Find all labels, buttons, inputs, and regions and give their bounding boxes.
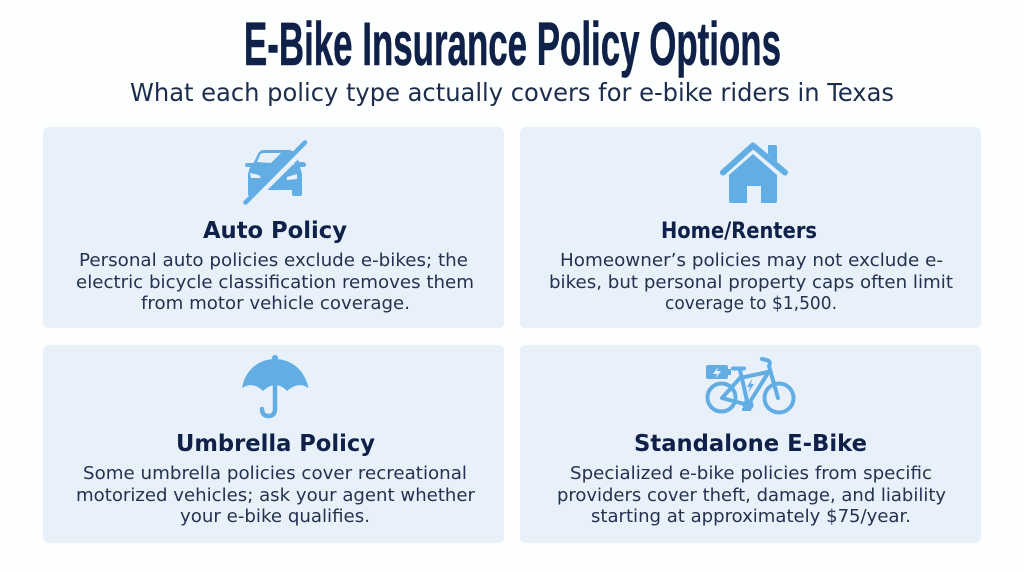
body text: standalone e-bike — [557, 463, 946, 527]
icon: umbrella — [242, 355, 308, 416]
icon: house — [723, 145, 785, 203]
body text: auto policy: from motor vehicle coverage. — [141, 293, 410, 314]
subtitle: What each policy type actually covers for e-bike riders in Texas — [130, 78, 894, 107]
body text: umbrella policy: Some umbrella policies cover recreational — [83, 463, 467, 484]
body text: standalone e-bike: starting at approximately $75/year. — [591, 506, 911, 527]
body text: home/renters — [549, 250, 953, 314]
body text: standalone e-bike: Specialized e-bike policies from specific — [570, 463, 932, 484]
body text: umbrella policy — [76, 463, 476, 527]
heading: standalone e-bike: Standalone E-Bike — [634, 431, 867, 457]
panel: auto policy — [43, 127, 504, 328]
body text: auto policy: electric bicycle classification removes them — [76, 272, 474, 293]
body text: home/renters: Homeowner’s policies may not exclude e- — [560, 250, 943, 271]
body text: auto policy — [76, 250, 474, 314]
icon: crossed-out car — [245, 142, 309, 205]
body text: umbrella policy: motorized vehicles; ask your agent whether — [76, 485, 476, 506]
body text: standalone e-bike: providers cover theft, damage, and liability — [557, 485, 946, 506]
body text: home/renters: coverage to $1,500. — [665, 294, 837, 314]
heading: umbrella policy: Umbrella Policy — [176, 431, 375, 457]
body text: auto policy: Personal auto policies exclude e-bikes; the — [79, 250, 468, 271]
panel: umbrella policy — [43, 345, 504, 543]
heading: home/renters: Home/Renters — [661, 219, 817, 244]
icon: electric bike — [706, 359, 794, 412]
body text: umbrella policy: your e-bike qualifies. — [180, 506, 370, 527]
body text: home/renters: bikes, but personal property caps often limit — [549, 272, 953, 293]
panel: home/renters — [520, 127, 981, 328]
panel: standalone e-bike — [520, 345, 981, 543]
heading: auto policy: Auto Policy — [203, 218, 347, 244]
